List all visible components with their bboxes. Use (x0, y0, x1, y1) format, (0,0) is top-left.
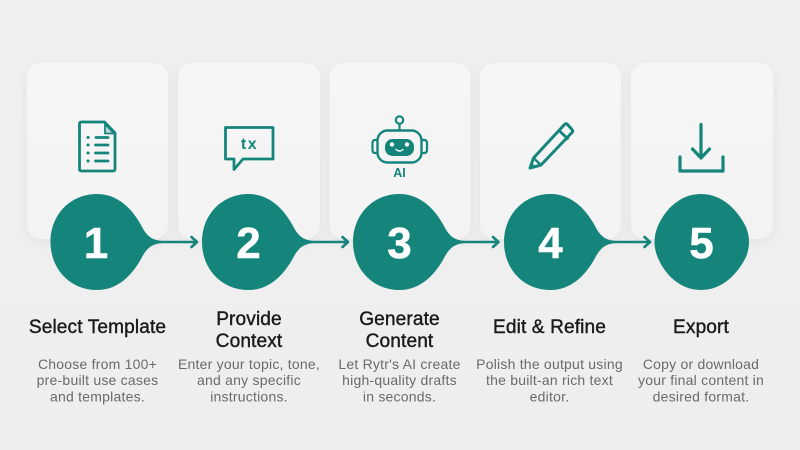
icon: download (680, 124, 723, 171)
icon: AI robot: AI (393, 166, 406, 180)
description: step 4: editor. (530, 388, 569, 404)
description: step 1: and templates. (50, 388, 145, 404)
panel: card 4 (480, 63, 621, 239)
step 3 badge: 3 (387, 219, 412, 268)
description: step 2: Enter your topic, tone, (178, 356, 320, 372)
panel: card 1 (27, 63, 168, 239)
step 5 badge (654, 194, 749, 290)
description: step 1: pre-built use cases (37, 372, 158, 388)
arrow: step 1 to 2 (157, 237, 197, 247)
description: step 5: desired format. (653, 388, 749, 404)
panel: card 5 (631, 63, 773, 239)
description: step 4: the built-an rich text (486, 372, 613, 388)
icon: AI robot (372, 116, 427, 180)
title: step 4: Edit & Refine (493, 317, 606, 338)
description: step 5: your final content in (638, 372, 764, 388)
description: step 3: high-quality drafts (342, 372, 457, 388)
description: step 3: Let Rytr's AI create (338, 356, 461, 372)
icon: text speech bubble: tx (241, 136, 258, 153)
description: step 1: Choose from 100+ (38, 356, 157, 372)
description: step 2: instructions. (210, 388, 288, 404)
step 4 badge: 4 (538, 219, 563, 268)
step 2 badge: 2 (236, 219, 261, 268)
title: step 3: Content (366, 331, 434, 352)
step 1 badge (50, 194, 161, 290)
title: step 2: Provide (216, 309, 282, 330)
icon: pencil (529, 124, 573, 170)
title: step 2: Context (216, 331, 283, 352)
description: step 2: and any specific (197, 372, 301, 388)
title: step 1: Select Template (29, 317, 166, 338)
step 4 badge (504, 194, 614, 290)
title: step 3: Generate (359, 309, 440, 330)
panel: card 2 (178, 63, 320, 239)
step 1 badge: 1 (84, 219, 108, 268)
step 5 badge: 5 (689, 219, 714, 268)
icon: document (80, 122, 115, 171)
description: step 5: Copy or download (643, 356, 759, 372)
arrow: step 2 to 3 (308, 237, 348, 247)
arrow: step 4 to 5 (610, 237, 650, 247)
description: step 4: Polish the output using (476, 356, 623, 372)
title: step 5: Export (673, 317, 730, 338)
step 2 badge (202, 194, 312, 290)
step 3 badge (353, 194, 464, 290)
arrow: step 3 to 4 (459, 237, 498, 247)
description: step 3: in seconds. (363, 388, 436, 404)
icon: text speech bubble (226, 128, 273, 170)
panel: card 3 (330, 63, 470, 239)
